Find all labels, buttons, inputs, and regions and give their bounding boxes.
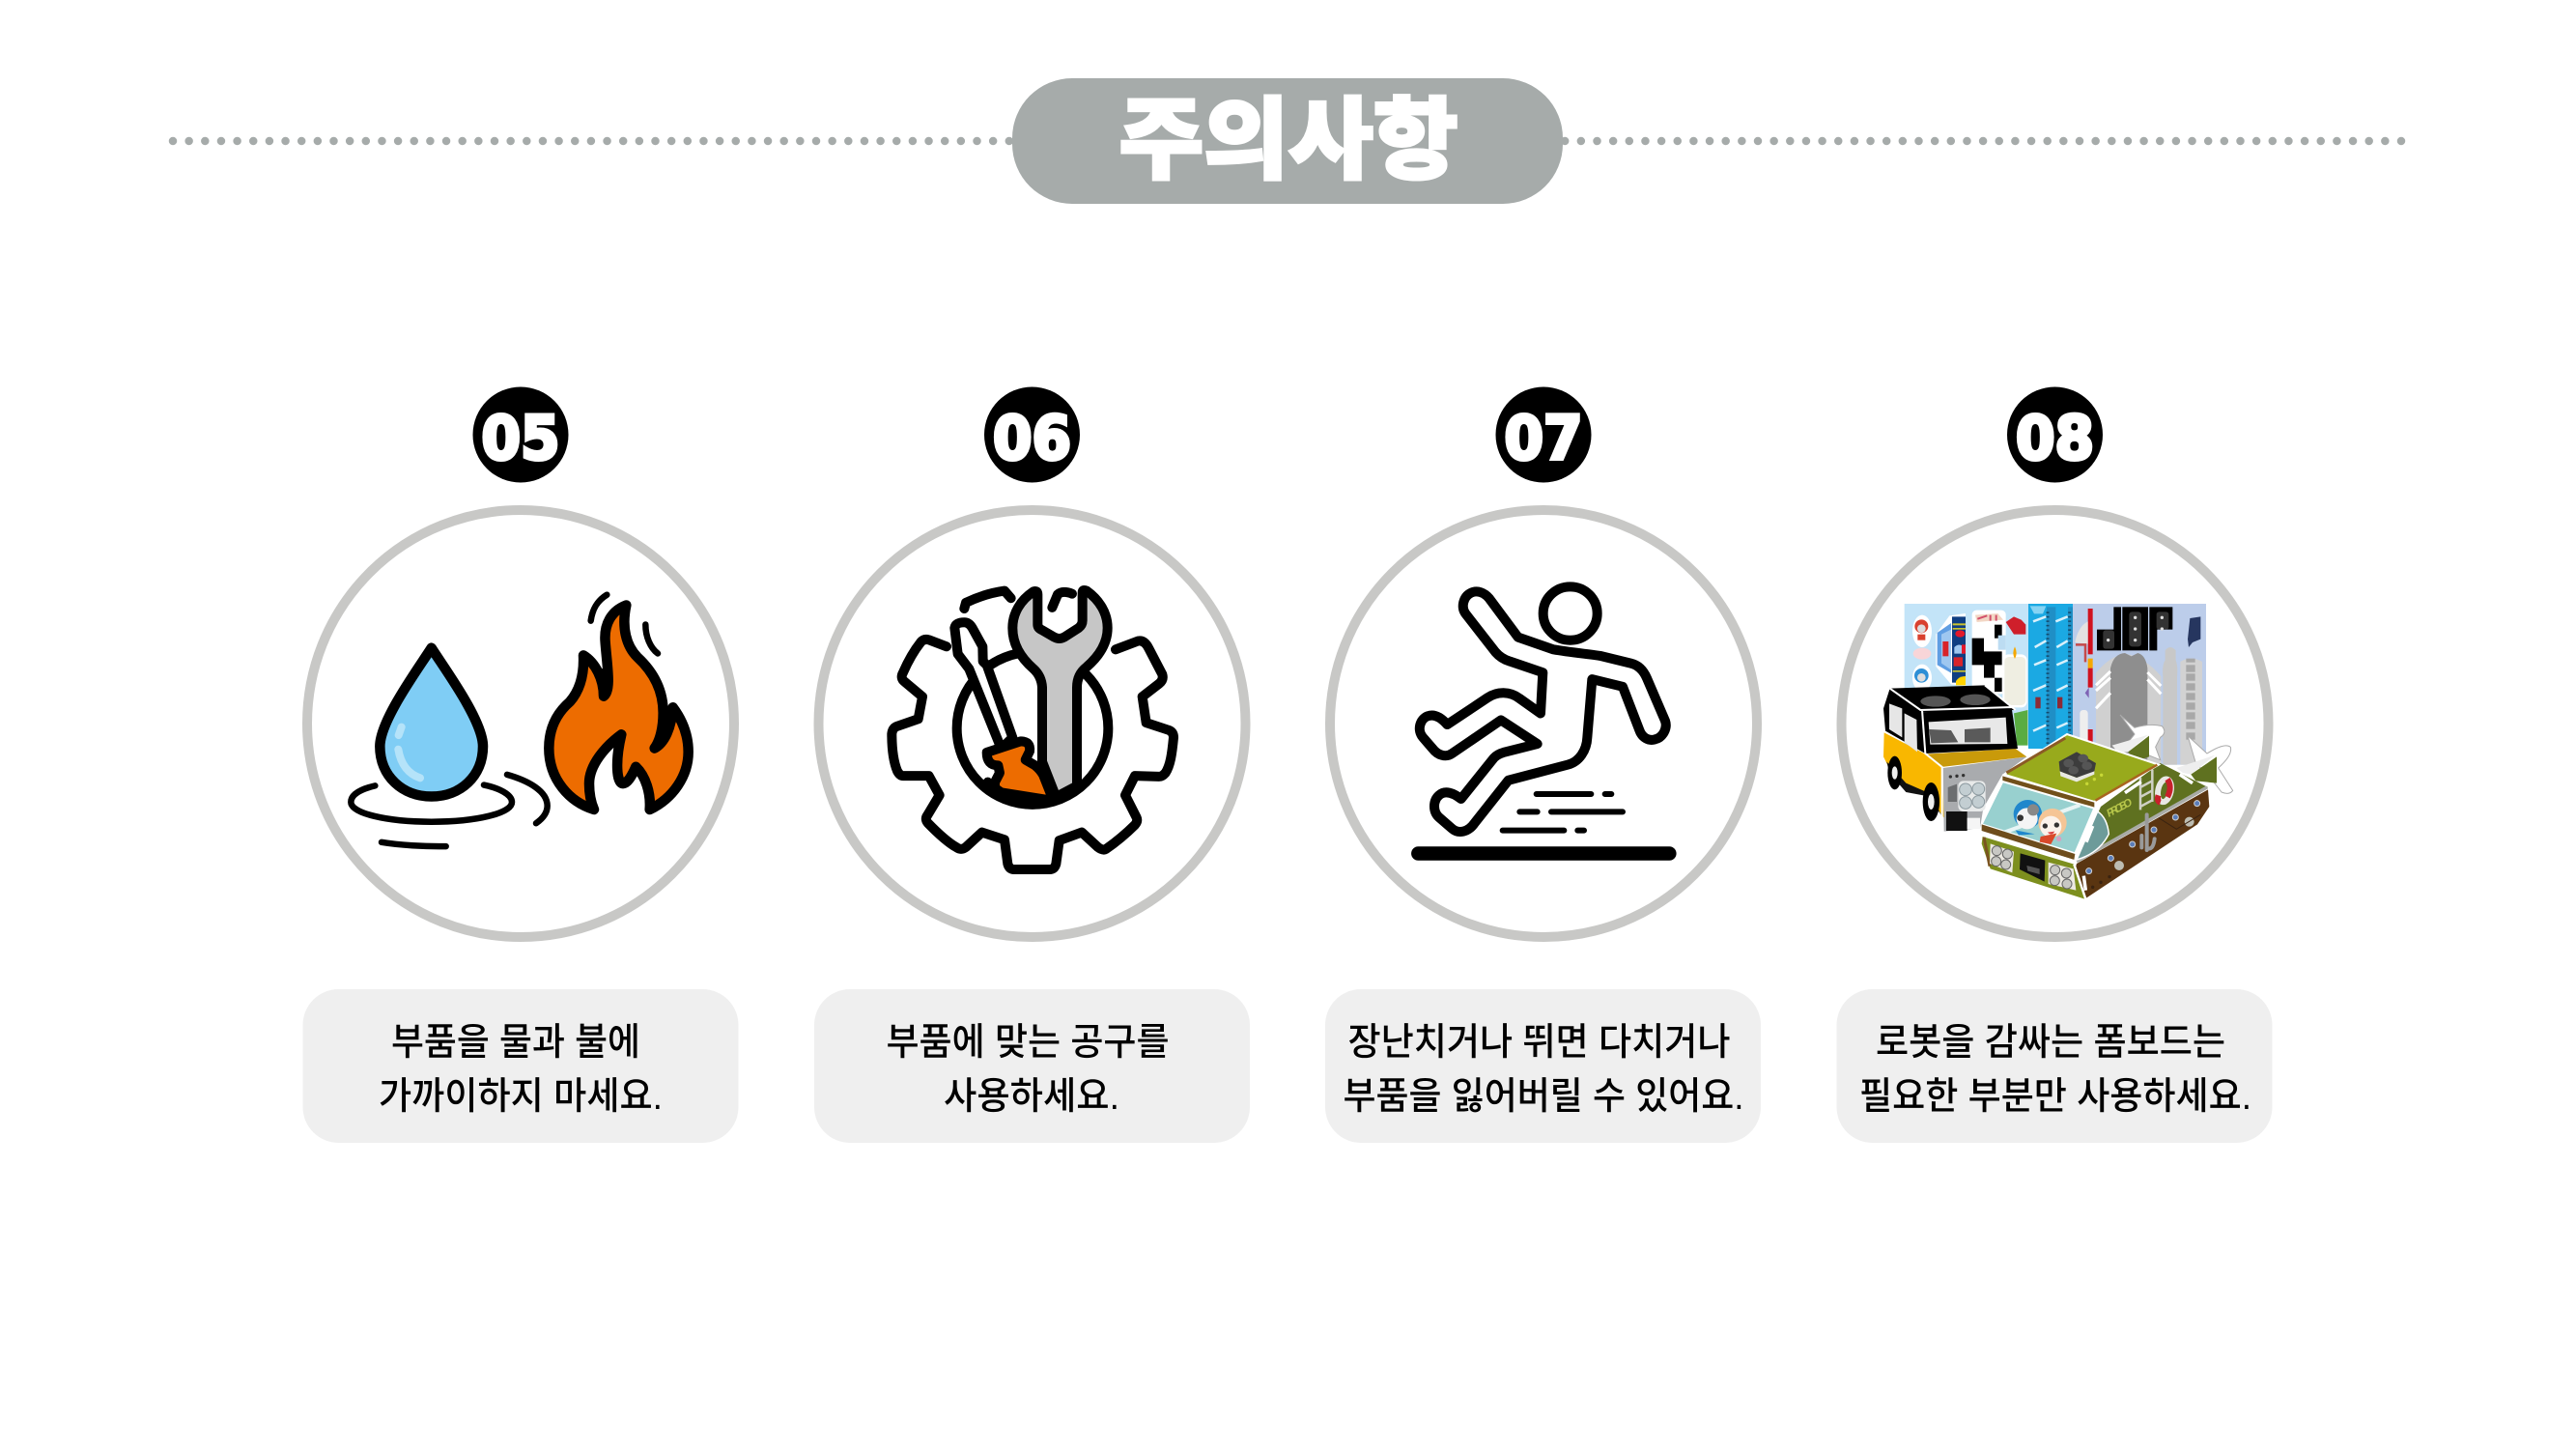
caption box 05: [303, 989, 738, 1143]
title text: 주의사항: [1118, 92, 1458, 190]
ring: [819, 510, 1246, 937]
panel: 07 slipping: [1325, 386, 1761, 1143]
icon: person slipping: [1418, 586, 1669, 854]
tank lettering: PROBO: [2105, 797, 2135, 820]
panel: 08 robot foam board: [1837, 386, 2272, 1143]
foam board sheets: [1905, 604, 2206, 765]
number badge 07: [1495, 386, 1592, 483]
caption box 08: 로봇을 감싸는 폼보드는: [1876, 1022, 2225, 1064]
caption box 05: 부품을 물과 불에: [391, 1022, 640, 1064]
yellow truck: [1881, 685, 2026, 834]
panel: 06 proper tools: [814, 386, 1250, 1143]
caption box 07: 부품을 잃어버릴 수 있어요.: [1343, 1076, 1744, 1118]
icon: foam board sheets and robot vehicles: [1881, 604, 2233, 899]
caption box 06: 사용하세요.: [944, 1076, 1119, 1118]
ring: [1841, 510, 2268, 937]
caption box 08: 필요한 부분만 사용하세요.: [1859, 1076, 2251, 1118]
caption box 05: 가까이하지 마세요.: [379, 1076, 663, 1118]
panel: 05 water and fire: [303, 386, 738, 1143]
ring: [307, 510, 734, 937]
caption box 07: [1325, 989, 1761, 1143]
number badge 07: 07: [1505, 403, 1582, 473]
number badge 06: [984, 386, 1080, 483]
caption box 06: [814, 989, 1250, 1143]
number badge 08: [2007, 386, 2103, 483]
title header: [173, 78, 2402, 204]
caption box 07: 장난치거나 뛰면 다치거나: [1348, 1022, 1731, 1064]
number badge 06: 06: [993, 403, 1071, 473]
green tank robot: [1982, 715, 2233, 899]
icon: gear, wrench and screwdriver: [892, 590, 1174, 869]
number badge 05: [473, 386, 568, 483]
icon: water drop and fire: [351, 595, 689, 846]
number badge 05: 05: [481, 403, 560, 473]
caption box 08: [1837, 989, 2272, 1143]
number badge 08: 08: [2016, 403, 2094, 473]
ring: [1330, 510, 1757, 937]
caption box 06: 부품에 맞는 공구를: [887, 1022, 1169, 1064]
